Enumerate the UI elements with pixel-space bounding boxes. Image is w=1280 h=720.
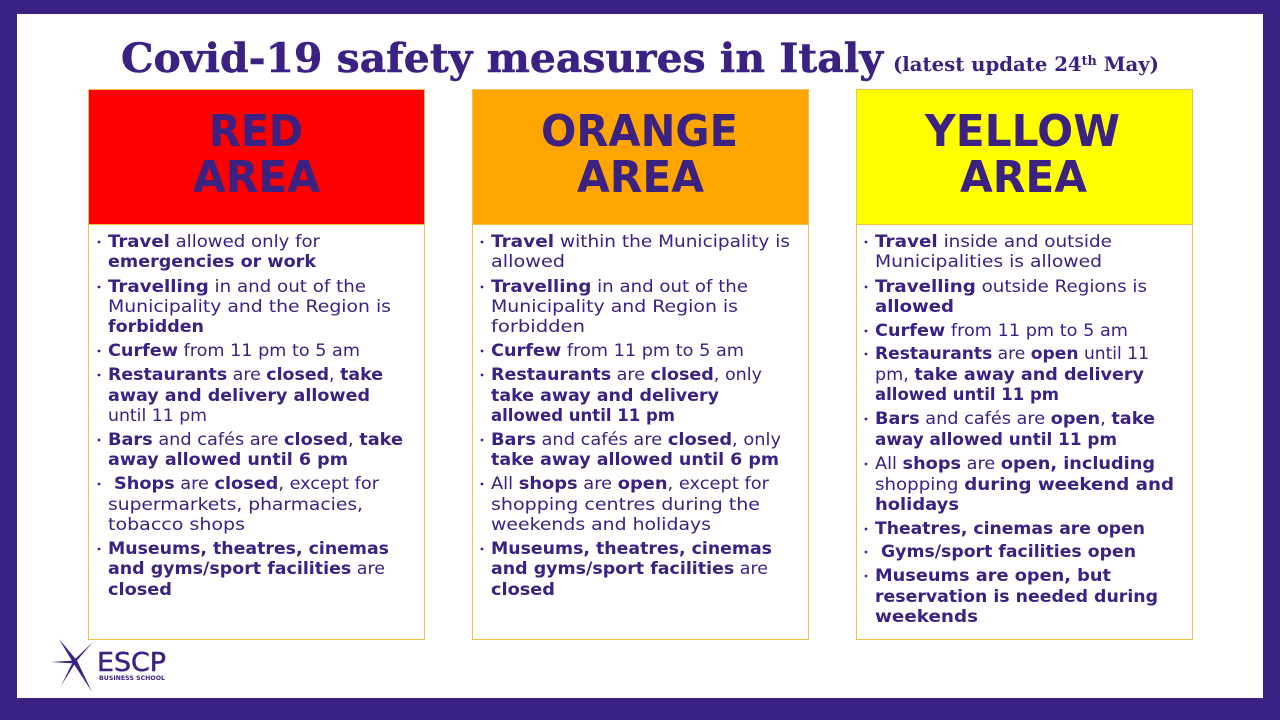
yellow area header (856, 90, 1192, 224)
orange: travel: Travel within the Municipality is (491, 232, 790, 251)
yellow: restaurants (865, 344, 1149, 404)
yellow: travel (865, 232, 1112, 271)
orange: bars (481, 430, 781, 469)
red: bars: Bars and cafés are closed , take (108, 430, 403, 449)
red: travel: emergencies or work (108, 252, 317, 271)
logo: ESCP Business School: ESCP (97, 648, 166, 678)
orange: museums: and gyms/sport facilities are (491, 559, 768, 578)
yellow area header: YELLOW (924, 106, 1120, 157)
logo: ESCP Business School (51, 639, 166, 692)
orange: restaurants: take away and delivery (491, 386, 719, 405)
orange: curfew: Curfew from 11 pm to 5 am (491, 341, 744, 360)
yellow: museums: weekends (875, 607, 978, 626)
red: travelling: Travelling in and out of the (108, 277, 366, 296)
orange: museums: Museums, theatres, cinemas (491, 539, 772, 558)
red: curfew: Curfew from 11 pm to 5 am (108, 341, 360, 360)
orange: shops: shopping centres during the (491, 495, 760, 514)
red: travel (98, 232, 320, 271)
orange: restaurants: allowed until 11 pm (491, 406, 675, 425)
panel: yellow area (856, 90, 1192, 640)
red area header: AREA (193, 152, 320, 203)
orange: travel: allowed (491, 252, 565, 271)
orange: bars: take away allowed until 6 pm (491, 450, 779, 469)
red: bars: away allowed until 6 pm (108, 450, 348, 469)
yellow: shops: shopping during weekend and (875, 475, 1174, 494)
panel: orange area (472, 90, 808, 640)
red: bars (98, 430, 403, 469)
yellow: curfew: Curfew from 11 pm to 5 am (875, 321, 1128, 340)
red: shops (98, 474, 379, 534)
red area header (88, 90, 424, 224)
red: shops: Shops are closed , except for (114, 474, 379, 493)
yellow: restaurants: pm, take away and delivery (875, 365, 1144, 384)
yellow area header: AREA (960, 152, 1087, 203)
orange: shops (481, 474, 769, 534)
yellow: shops: holidays (875, 495, 959, 514)
title: Covid-19 safety measures in Italy (121, 35, 885, 82)
red area header: RED (209, 106, 303, 157)
red: travelling (98, 277, 391, 336)
red: restaurants: Restaurants are closed, take (108, 365, 383, 384)
yellow: travelling: allowed (875, 297, 954, 316)
orange area header (472, 90, 808, 224)
title: th (1082, 54, 1097, 69)
yellow: bars: away allowed until 11 pm (875, 430, 1117, 449)
yellow: bars: Bars and cafés are open, take (875, 409, 1155, 428)
yellow: travelling (865, 277, 1147, 316)
orange: travelling: forbidden (491, 317, 585, 336)
orange: restaurants: Restaurants are closed, only (491, 365, 762, 384)
red: museums: and gyms/sport facilities are (108, 559, 385, 578)
yellow: museums (865, 566, 1158, 626)
yellow: museums: reservation is needed during (875, 587, 1158, 606)
panel: red area (88, 90, 424, 640)
orange area header: ORANGE (541, 106, 738, 157)
orange: shops: All shops are open, except for (491, 474, 769, 493)
title: May) (1097, 52, 1159, 76)
red: museums: closed (108, 580, 172, 599)
yellow: travel: Travel inside and outside (875, 232, 1112, 251)
yellow: gyms: Gyms/sport facilities open (881, 542, 1136, 561)
yellow: theatres: Theatres, cinemas are open (875, 519, 1145, 538)
yellow: bars (865, 409, 1155, 449)
orange: museums (481, 539, 772, 599)
yellow: travelling: Travelling outside Regions is (875, 277, 1147, 296)
yellow: restaurants: Restaurants are open until 11 (875, 344, 1149, 363)
orange: travelling: Travelling in and out of the (491, 277, 748, 296)
yellow: museums: Museums are open, but (875, 566, 1111, 585)
title: (latest update 24 (893, 52, 1085, 76)
red: travelling: forbidden (108, 317, 204, 336)
red: shops: supermarkets, pharmacies, (108, 495, 363, 514)
orange: travelling (481, 277, 748, 336)
yellow: shops: All shops are open, including (875, 454, 1155, 473)
orange: bars: Bars and cafés are closed , only (491, 430, 781, 449)
orange: museums: closed (491, 580, 555, 599)
orange: shops: weekends and holidays (491, 515, 711, 534)
red: restaurants (98, 365, 383, 425)
yellow: restaurants: allowed until 11 pm (875, 385, 1059, 404)
red: restaurants: away and delivery allowed (108, 386, 370, 405)
red: museums: Museums, theatres, cinemas (108, 539, 389, 558)
red: museums (98, 539, 389, 599)
red: travel: Travel allowed only for (108, 232, 320, 251)
yellow: shops (865, 454, 1174, 514)
yellow: travel: Municipalities is allowed (875, 252, 1102, 271)
red: shops: tobacco shops (108, 515, 245, 534)
orange area header: AREA (577, 152, 704, 203)
orange: restaurants (481, 365, 762, 425)
orange: travelling: Municipality and Region is (491, 297, 738, 316)
red: travelling: Municipality and the Region is (108, 297, 391, 316)
orange: travel (481, 232, 790, 271)
red: restaurants: until 11 pm (108, 406, 207, 425)
icon: ESCP star (51, 639, 93, 692)
logo: ESCP Business School: BUSINESS SCHOOL (99, 675, 165, 682)
